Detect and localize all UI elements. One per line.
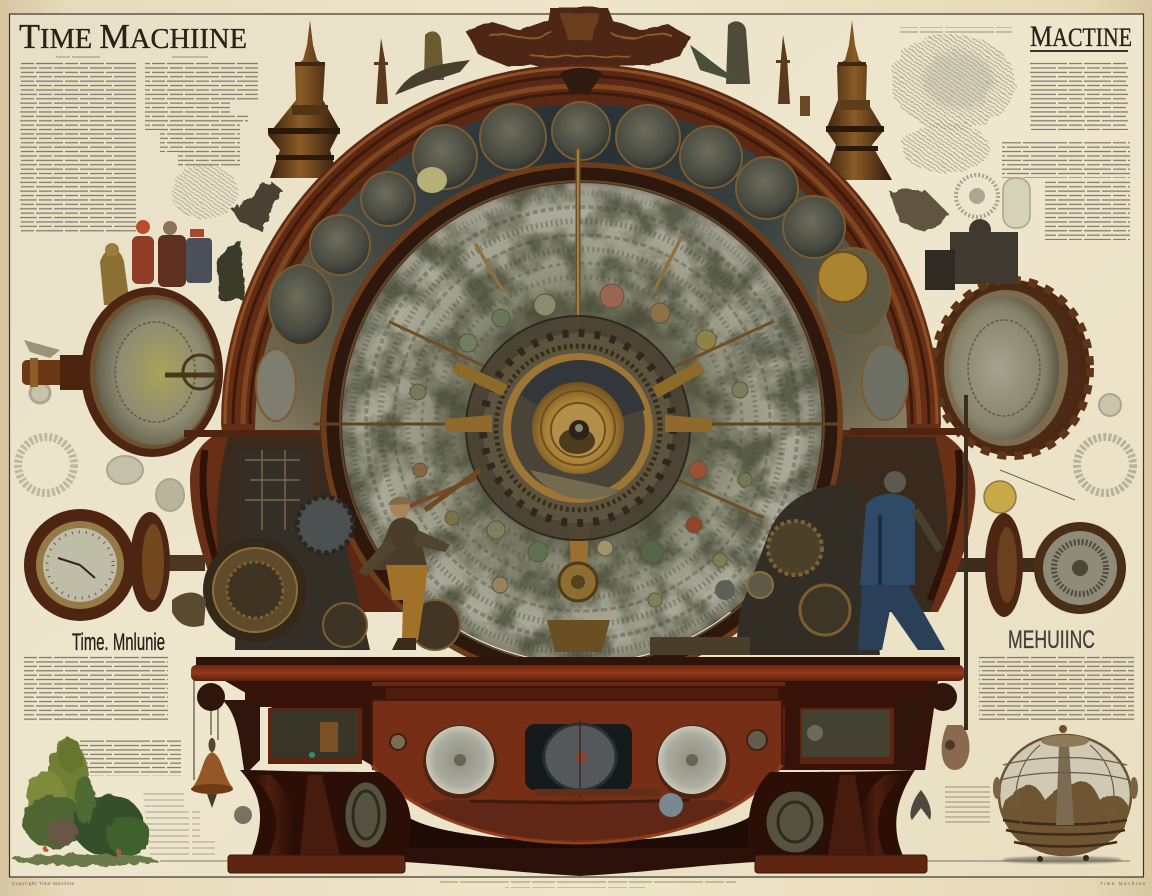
icon: small left emblem: [234, 806, 252, 824]
heading: top left title: TIME MACHIINE: [19, 17, 247, 56]
sketch: bottle: [1003, 178, 1030, 228]
hub: central brass mechanism: [445, 316, 712, 540]
footer caption: left: Copyright Time Machine: [12, 881, 74, 886]
glass: arched window band: [255, 104, 907, 430]
sketch: top right large engraving: [891, 34, 1015, 130]
cabinet: dark base between feet: [405, 848, 755, 876]
sketch: round engraving: [956, 175, 998, 217]
text block: top left column one: [20, 55, 136, 232]
icon: pendant ornament: [942, 725, 969, 770]
clock: lower left clock and axle: [24, 509, 205, 621]
footer caption: right: Time Machine: [1100, 881, 1145, 886]
medallions: row of gauges in the arch window: [256, 102, 908, 421]
cabinet: redrawn bowl edge: [372, 765, 782, 843]
inner base line: [160, 860, 1130, 862]
heading: top right title: MACTINE: [1030, 20, 1132, 53]
rod: right vertical rod: [964, 395, 968, 730]
figure: man in orange trousers: [358, 470, 480, 650]
icon: bell pendant: [191, 680, 233, 808]
chart-like dial: main engraved dial face: [340, 180, 824, 664]
cabinet: carved dark opening under bowl: [405, 815, 752, 860]
finials and statues along the crown: [374, 21, 810, 116]
sketch: top right oval engraving: [902, 123, 990, 173]
machine: right dark box on ledge: [925, 219, 1018, 290]
cabinet: right leg: [748, 770, 915, 860]
cabinet: right picture panel: [800, 708, 894, 764]
illustration: globe sphere cage: [993, 725, 1138, 864]
leaves: side foliage: [215, 180, 950, 300]
title rule: top right: [1030, 50, 1128, 52]
cabinet: right foot: [755, 855, 927, 873]
cabinet: left leg: [240, 770, 411, 860]
medallion: small cream tag: [417, 167, 447, 193]
shelf: arch side brackets: [184, 428, 970, 437]
icon: left cannon barrel: [22, 340, 86, 390]
frame: inner wooden ring: [324, 165, 840, 681]
text block: top right column: [900, 27, 1130, 240]
cabinet: table top: [191, 657, 964, 681]
sketch: left engraving: [171, 165, 239, 219]
icon: lower spoke gear and base: [547, 563, 610, 652]
medallion: yellow clock face: [818, 252, 868, 302]
text block: lower left faded: [143, 792, 215, 856]
gauge: left round gauge: [81, 287, 223, 457]
text block: lower right small: [945, 783, 990, 823]
text block: top left column two: [145, 55, 258, 166]
gauge: right round gauge: [934, 280, 1090, 456]
sketch: lower right engravings: [984, 394, 1133, 513]
spokes: brass arms from the hub: [315, 150, 840, 590]
heading: lower right title: MEHUIINC: [1008, 626, 1095, 654]
figures: group on left ledge: [100, 220, 212, 305]
text block: lower right: [979, 655, 1134, 721]
illustration: tree and bushes: [13, 738, 157, 866]
cabinet: main body and bowl: [225, 681, 938, 843]
text block: lower left: [24, 655, 168, 721]
tower: left spire: [268, 20, 340, 178]
heading: lower left title: Time. Mnlunie: [72, 629, 165, 656]
crown: small dark bracket below crest: [560, 68, 602, 92]
machinery: right gears and engine: [650, 484, 880, 655]
cabinet: left silver gauge: [423, 725, 497, 799]
sketch: lower left engravings: [18, 383, 184, 511]
coins: coloured medallions on the dial: [410, 284, 752, 607]
cabinet: right silver gauge: [656, 725, 730, 799]
crest: top carved ornament: [466, 8, 690, 66]
cabinet: left picture panel: [268, 708, 362, 764]
icon: small creature: [910, 790, 931, 820]
cabinet: central window gauge: [525, 720, 632, 798]
footer caption: centre: [440, 881, 736, 890]
cabinet: left foot: [228, 855, 405, 873]
cabinet: small knobs and glass ball: [390, 730, 767, 817]
clock: lower right clock and axle: [945, 513, 1126, 617]
machinery: left gears and engine: [172, 450, 460, 650]
cabinet: scroll brackets: [197, 683, 957, 775]
figure: man in blue coat: [858, 471, 945, 650]
tower: right spire: [824, 20, 892, 180]
frame: main wooden arch: [190, 64, 975, 612]
text block: lower left second: [78, 738, 181, 776]
